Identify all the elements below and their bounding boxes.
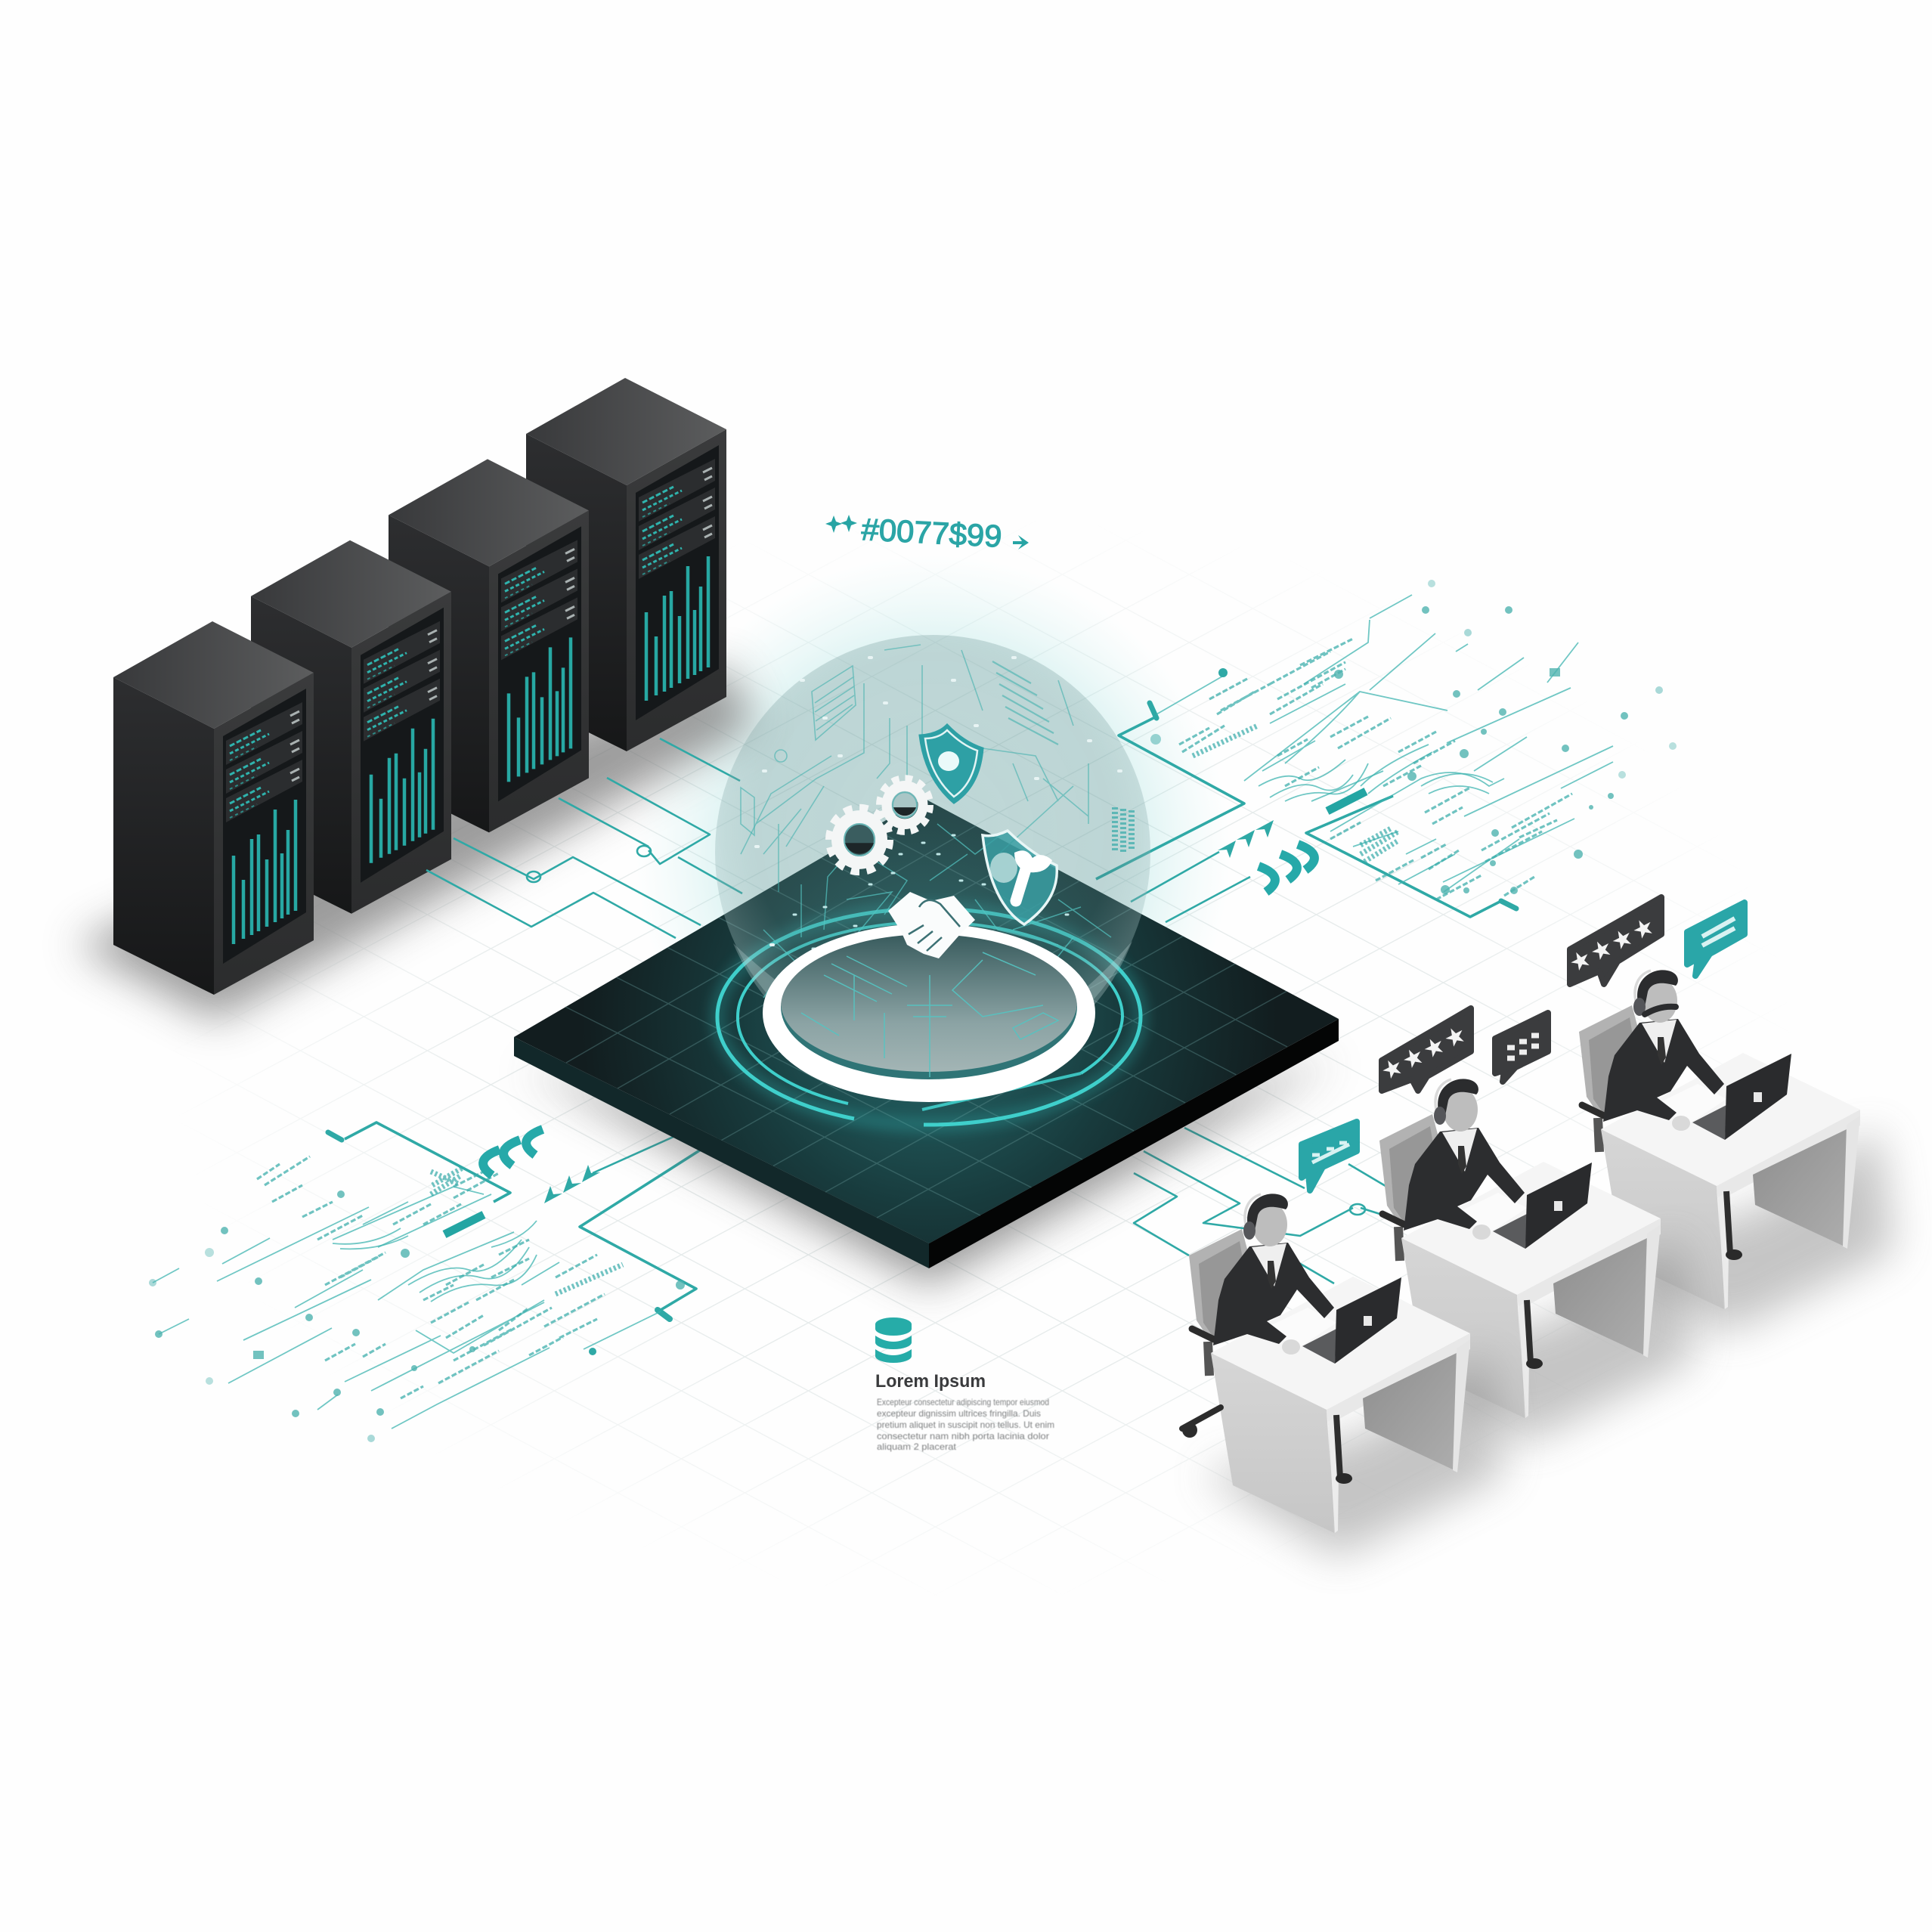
icon: wrench shield [983, 831, 1057, 924]
white service ring [763, 924, 1095, 1102]
dome glow [634, 554, 1231, 1151]
holographic dome [715, 635, 1150, 1070]
caption body: aliquam 2 placerat [877, 1441, 957, 1452]
caption body: consectetur nam nibh porta lacinia dolor [877, 1431, 1049, 1441]
platform left side [514, 1037, 929, 1268]
teal glow rings [717, 909, 1141, 1125]
dark circuits over the platform [763, 824, 1111, 998]
caption body: Excepteur consectetur adipiscing tempor eiusmod [877, 1397, 1049, 1407]
caption body: pretium aliquet in suscipit non tellus. Ut enim [877, 1420, 1054, 1430]
server 2 [251, 540, 451, 914]
right data lines and arrows [1131, 820, 1314, 922]
interior circuits [801, 952, 1058, 1077]
icon: database [875, 1317, 912, 1363]
left sparks [825, 515, 857, 533]
code text: #0077$99 [861, 512, 1003, 554]
moustache detail on operator 3 [1645, 1007, 1676, 1014]
left data lines and arrows [483, 1113, 726, 1203]
platform right side [929, 1019, 1339, 1268]
icon: handshake [888, 892, 975, 958]
platform grid [565, 825, 1287, 1218]
small gear [880, 779, 930, 831]
server rack row [76, 378, 756, 1020]
station 1 [1189, 1194, 1504, 1557]
station 3 [1579, 970, 1894, 1333]
circuit panel: left [149, 1113, 726, 1442]
connectors: servers to hub [426, 738, 742, 938]
icon: security shield [920, 725, 983, 803]
central platform [514, 798, 1339, 1268]
dome particles [756, 658, 1121, 945]
bubble: dots [1495, 1013, 1548, 1082]
platform top [514, 798, 1339, 1243]
right panel frame [1096, 668, 1516, 917]
server 3 [389, 459, 589, 832]
isometric floor grid [277, 588, 1681, 1528]
left panel nodes [149, 1190, 685, 1442]
right panel traces [1179, 595, 1613, 899]
ring interior [774, 933, 1084, 1085]
platform shadow [522, 1058, 1338, 1285]
circuit panel: right [1096, 580, 1677, 922]
connectors: hub to operators [1134, 1128, 1389, 1283]
icon: gears [830, 779, 930, 871]
station 2 [1379, 1079, 1695, 1442]
left panel frame [328, 1122, 726, 1355]
bubble: teal message [1687, 903, 1745, 976]
dome bottom lip [733, 941, 1132, 1070]
chair base [1182, 1407, 1221, 1438]
bubble: teal text [1302, 1122, 1357, 1190]
large gear [830, 809, 889, 871]
server 4 [526, 378, 726, 751]
caption block [875, 1317, 1054, 1452]
server 1 [113, 621, 314, 995]
right panel nodes [1150, 580, 1677, 894]
operator stations [1182, 970, 1894, 1557]
bubble: stars middle: ★★★★ [1376, 1019, 1471, 1086]
dome circuit lines [741, 645, 1132, 892]
left panel traces [153, 1156, 623, 1429]
caption title: Lorem Ipsum [875, 1371, 986, 1392]
hash code label [825, 512, 1029, 554]
review bubbles [1302, 897, 1745, 1190]
right arrow [1013, 535, 1029, 550]
caption body [877, 1397, 1054, 1452]
caption body: excepteur dignissim ultrices fringilla. Duis [877, 1408, 1041, 1419]
bubble: stars top: ★★★★ [1564, 911, 1659, 978]
